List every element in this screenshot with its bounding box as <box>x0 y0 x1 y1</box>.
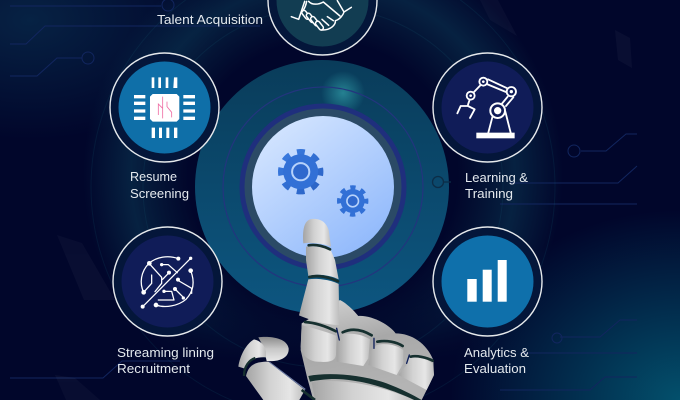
icon: robot arm <box>457 78 516 138</box>
thumb base <box>246 362 305 400</box>
knuckle four <box>398 357 434 390</box>
joint lines <box>305 322 433 361</box>
base <box>299 279 339 325</box>
back of hand silhouette <box>301 300 434 400</box>
notches <box>337 328 409 363</box>
icon: large gear <box>281 152 320 191</box>
robot hand <box>238 219 434 400</box>
middle <box>306 246 339 279</box>
thumb joint line <box>244 358 255 376</box>
icon: handshake <box>291 1 351 31</box>
label: analytics and evaluation <box>464 345 529 376</box>
label: resume screening: Screening <box>130 186 189 201</box>
badge: streamlining recruitment <box>113 227 222 336</box>
badge: talent acquisition <box>268 0 377 55</box>
knuckle three <box>368 344 403 375</box>
outer teal disc <box>195 60 449 314</box>
label: resume screening: Resume <box>130 169 177 184</box>
light inner disc <box>252 116 394 258</box>
badge: resume screening <box>110 53 219 162</box>
label: learning and training: Learning & <box>465 170 528 185</box>
label: resume screening <box>130 169 189 201</box>
label: talent acquisition: Talent Acquisition <box>157 12 263 27</box>
label: analytics and evaluation: Evaluation <box>464 361 526 376</box>
label: streamlining recruitment <box>117 345 214 376</box>
thumb tip <box>258 337 289 361</box>
label: learning and training <box>465 170 528 201</box>
icon: chip <box>134 77 195 138</box>
label: learning and training: Training <box>465 186 513 201</box>
hand body <box>238 300 434 400</box>
badge: analytics and evaluation <box>433 227 542 336</box>
icon: small gear <box>339 188 366 214</box>
connector node <box>432 176 451 188</box>
glow spot <box>321 71 365 115</box>
index knuckle <box>301 325 337 362</box>
knuckle two <box>337 334 370 366</box>
palm band <box>308 374 422 400</box>
icon: circuit globe <box>141 257 193 309</box>
label: streamlining recruitment: Recruitment <box>117 361 190 376</box>
label: streamlining recruitment: Streaming lining <box>117 345 214 360</box>
thumb joint <box>238 339 266 368</box>
icon: bar chart <box>467 260 507 302</box>
central dial <box>195 60 451 314</box>
finger joints <box>309 245 338 281</box>
index finger <box>299 219 339 325</box>
label: analytics and evaluation: Analytics & <box>464 345 529 360</box>
tip <box>303 219 331 247</box>
palm <box>312 381 414 400</box>
badge: learning and training <box>433 53 542 162</box>
